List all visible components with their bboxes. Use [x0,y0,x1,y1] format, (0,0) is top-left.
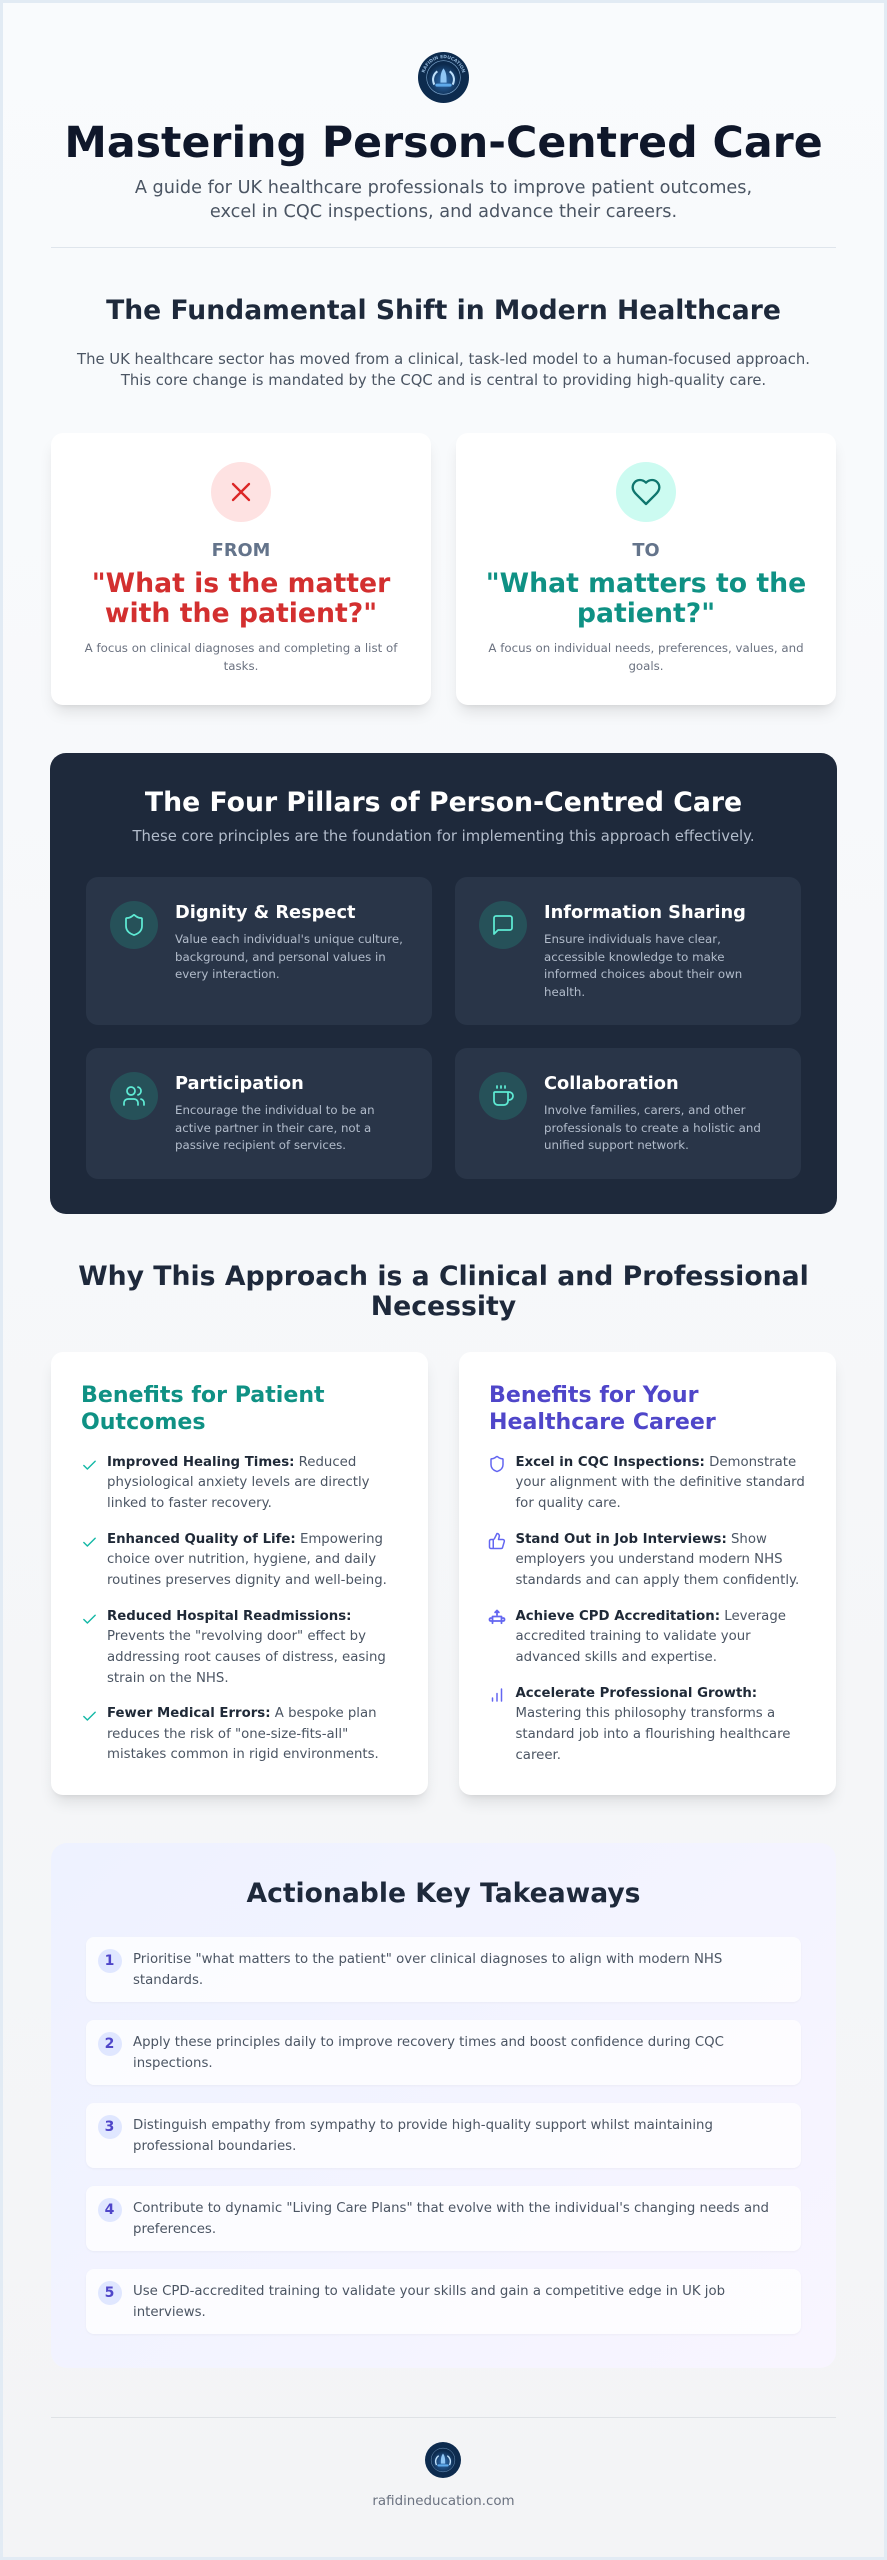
subtitle: excel in CQC inspections, and advance their careers. [210,202,677,222]
logo: footer emblem [425,2442,461,2478]
patient benefits heading: Benefits for Patient [81,1382,325,1408]
takeaway 3 [86,2103,801,2168]
benefit: cqc: for quality care. [516,1496,621,1511]
benefit: growth: Mastering this philosophy transforms a [516,1706,775,1721]
number [98,1949,122,1973]
pillar text: Value each individual's unique culture, [175,932,403,946]
heading: why this approach: Why This Approach is a Clinical and Professional [78,1261,809,1292]
benefit: quality of life: routines preserves dignity and well-being. [107,1573,387,1588]
from description: tasks. [224,659,258,673]
benefit: growth: Accelerate Professional Growth: [516,1686,757,1700]
icon: shield [490,1456,504,1472]
career benefits heading: Healthcare Career [489,1408,716,1434]
from description: A focus on clinical diagnoses and completing a list of [85,641,397,655]
pillar text: passive recipient of services. [175,1138,346,1152]
patient benefits heading [81,1382,325,1434]
text [133,2284,725,2320]
benefit: readmissions [107,1608,386,1686]
pillar title: Dignity & Respect [175,902,355,922]
heading: key takeaways: Actionable Key Takeaways [246,1878,640,1909]
pillar title: Collaboration [544,1072,679,1094]
icon: shield [110,901,158,949]
text: Apply these principles daily to improve recovery times and boost confidence during CQC [133,2034,724,2050]
to quote: "What matters to the [486,568,806,598]
heading: why this approach [78,1261,809,1322]
benefit: quality of life: Enhanced Quality of Life: Empowering [107,1532,383,1546]
text: inspections. [133,2056,213,2070]
benefit: healing [107,1454,370,1511]
text: Use CPD-accredited training to validate your skills and gain a competitive edge in UK job [133,2284,725,2298]
text [133,2200,769,2236]
career benefits heading [489,1382,716,1434]
pillar text [544,1103,761,1152]
icon: check [83,1712,96,1721]
benefit: interviews [516,1532,799,1588]
panel: from card [51,433,431,705]
pillar text: background, and personal values in [175,950,386,964]
career benefits heading: Benefits for Your [489,1382,698,1408]
pillar text: health. [544,985,585,999]
number: 2 [105,2036,114,2052]
pillars heading: The Four Pillars of Person-Centred Care [145,787,742,818]
pillars subheading: These core principles are the foundation for implementing this approach effectively. [132,828,755,845]
to description [488,641,804,673]
icon: accreditation [488,1610,506,1624]
pillar text: Ensure individuals have clear, [544,932,721,946]
patient benefit list [83,1454,387,1762]
heading: the fundamental shift: The Fundamental Shift in Modern Healthcare [106,295,781,326]
from quote: with the patient?" [105,598,377,628]
benefit: quality of life: choice over nutrition, hygiene, and daily [107,1552,376,1567]
intro paragraph: This core change is mandated by the CQC and is central to providing high-quality care. [121,372,766,389]
to quote [486,568,806,628]
benefit: interviews: employers you understand modern NHS [516,1552,783,1567]
benefit: errors: Fewer Medical Errors: A bespoke plan [107,1706,377,1721]
intro paragraph [76,351,810,389]
pillar text: informed choices about their own [544,967,742,981]
takeaway 1 [86,1937,801,2002]
takeaway 4 [86,2186,801,2251]
pillar text [544,932,742,999]
benefit: cpd: advanced skills and expertise. [516,1650,717,1665]
from label: FROM [212,540,270,561]
career benefit list [488,1454,805,1763]
pillar text [175,932,403,981]
text [133,1952,722,1988]
panel: key takeaways [51,1843,836,2368]
panel: career benefits [459,1352,836,1795]
benefit: readmissions: strain on the NHS. [107,1671,229,1686]
pillar text: professionals to create a holistic and [544,1121,761,1135]
benefit: readmissions: Prevents the "revolving door" effect by [107,1629,366,1644]
benefit: cpd: Achieve CPD Accreditation: Leverage [516,1608,786,1624]
pillar text: every interaction. [175,967,280,981]
benefit: healing: linked to faster recovery. [107,1496,272,1511]
header divider [51,247,836,248]
icon: bars [492,1688,502,1702]
pillar title: Participation [175,1072,304,1094]
from description [84,641,398,673]
pillar title: Information Sharing [544,902,746,922]
benefit: growth [516,1686,790,1763]
footer website: rafidineducation.com [372,2494,515,2508]
pillar text: Encourage the individual to be an [175,1103,375,1117]
text: Contribute to dynamic "Living Care Plans" that evolve with the individual's changing needs and [133,2200,769,2216]
pillar text: unified support network. [544,1138,689,1152]
pillar text: accessible knowledge to make [544,950,724,964]
icon: x [211,462,271,522]
pillar text: Involve families, carers, and other [544,1103,745,1117]
text: preferences. [133,2222,216,2236]
pillar: collaboration [455,1048,801,1179]
from quote: "What is the matter [92,568,390,598]
pillar text [175,1103,375,1152]
title: Mastering Person-Centred Care [64,118,823,168]
icon: check [83,1614,96,1624]
icon: thumbs up [488,1532,506,1550]
to quote: patient?" [577,598,715,628]
benefit: cqc [516,1454,805,1511]
patient benefits heading: Outcomes [81,1408,206,1434]
icon: check [83,1538,96,1547]
logo: top emblem [418,52,469,103]
benefit: readmissions: addressing root causes of distress, easing [107,1650,386,1665]
benefit: healing: Improved Healing Times: Reduced [107,1454,356,1470]
benefit: cqc: Excel in CQC Inspections: Demonstrate [516,1454,796,1470]
text [133,2034,724,2070]
icon: users [110,1072,158,1120]
benefit: quality of life [107,1532,387,1588]
panel: patient benefits [51,1352,428,1795]
icon: cup [479,1072,527,1120]
to description: A focus on individual needs, preferences, values, and [488,641,804,655]
panel: four pillars [50,753,837,1214]
benefit: growth: standard job into a flourishing healthcare [516,1727,790,1742]
number [98,2198,122,2222]
number [98,2115,122,2139]
number: 4 [105,2202,114,2218]
to label: TO [632,540,660,561]
icon: heart [616,462,676,522]
benefit: errors [107,1706,379,1762]
number: 3 [105,2119,114,2135]
number: 1 [105,1953,114,1969]
benefit: cqc: your alignment with the definitive standard [516,1475,805,1490]
number: 5 [105,2285,114,2301]
icon: check [83,1460,96,1470]
benefit: interviews: standards and can apply them confidently. [516,1573,799,1588]
benefit: healing: physiological anxiety levels are directly [107,1475,370,1490]
subtitle [135,178,752,222]
text: Prioritise "what matters to the patient" over clinical diagnoses to align with modern NHS [133,1952,722,1966]
intro paragraph: The UK healthcare sector has moved from a clinical, task-led model to a human-focused approach. [77,351,810,368]
benefit: growth: career. [516,1748,561,1763]
pillar text: active partner in their care, not a [175,1121,371,1135]
benefit: cpd [516,1608,786,1665]
logo: top emblem: RAFIDIN EDUCATION [422,54,466,73]
benefit: errors: mistakes common in rigid environments. [107,1747,379,1762]
pillar: dignity and respect [86,877,432,1025]
footer divider [51,2417,836,2418]
pillar: participation [86,1048,432,1179]
number [98,2281,122,2305]
heading: why this approach: Necessity [371,1291,516,1322]
takeaway 5 [86,2269,801,2334]
number [98,2032,122,2056]
text: standards. [133,1972,203,1988]
benefit: interviews: Stand Out in Job Interviews: Show [516,1532,767,1546]
subtitle: A guide for UK healthcare professionals to improve patient outcomes, [135,178,752,198]
to description: goals. [628,659,664,673]
icon: message [479,901,527,949]
from quote [92,568,390,628]
text [133,2118,713,2154]
benefit: cpd: accredited training to validate your [516,1629,751,1644]
panel: to card [456,433,836,705]
text: interviews. [133,2304,206,2320]
pillar: information sharing [455,877,801,1025]
text: professional boundaries. [133,2138,296,2154]
benefit: readmissions: Reduced Hospital Readmissions: [107,1608,351,1624]
benefit: errors: reduces the risk of "one-size-fits-all" [107,1727,348,1742]
text: Distinguish empathy from sympathy to provide high-quality support whilst maintaining [133,2118,713,2132]
takeaway 2 [86,2020,801,2085]
